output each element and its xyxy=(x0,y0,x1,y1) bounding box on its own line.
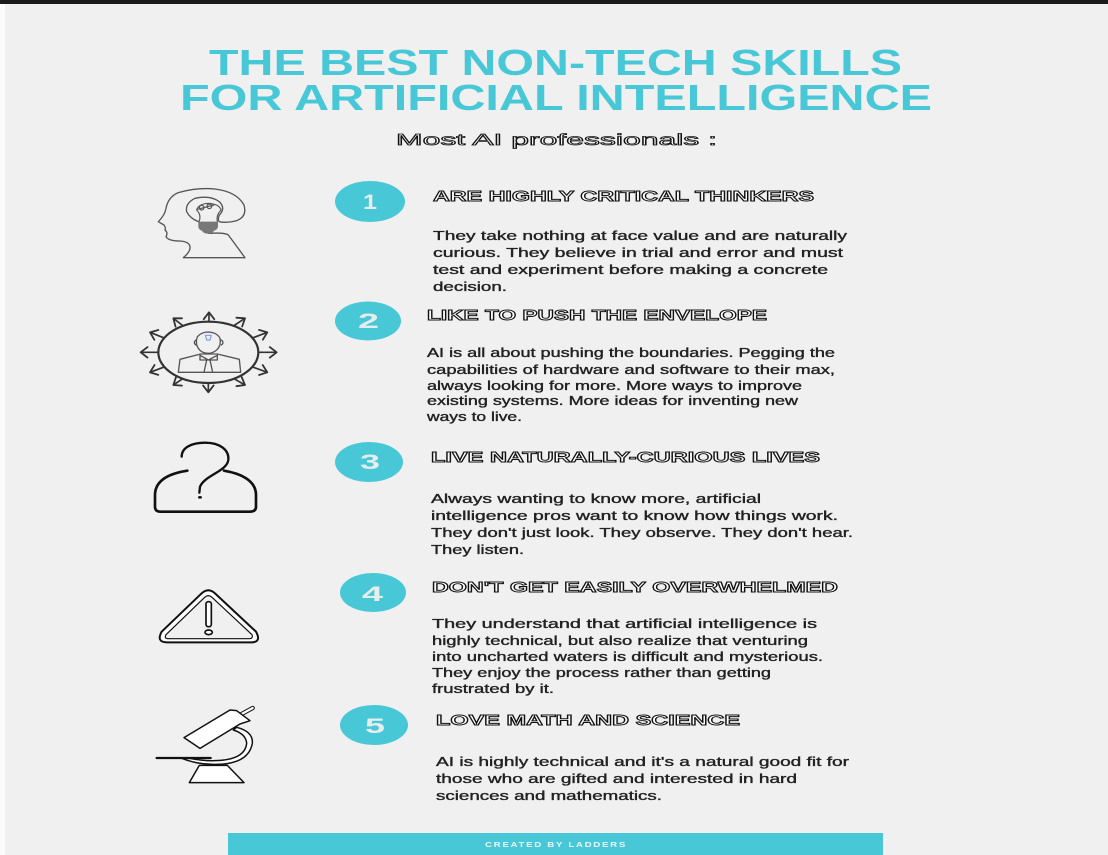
number badge 2: 2 xyxy=(358,310,379,333)
title: THE BEST NON-TECH SKILLS xyxy=(209,42,902,83)
text block 2: existing systems. More ideas for inventing new xyxy=(427,394,799,408)
text block 4: frustrated by it. xyxy=(432,682,554,696)
title: FOR ARTIFICIAL INTELLIGENCE xyxy=(180,77,932,118)
footer banner: CREATED BY LADDERS xyxy=(485,842,627,849)
icon: person inside circle with radiating arrows xyxy=(141,312,277,392)
text block 2: ways to live. xyxy=(426,410,522,424)
text block 1: decision. xyxy=(433,280,507,294)
number badge 1: 1 xyxy=(363,191,377,214)
heading 5: LOVE MATH AND SCIENCE xyxy=(436,712,740,729)
panel: skill 3 naturally curious xyxy=(155,442,853,557)
text block 2: capabilities of hardware and software to their max, xyxy=(427,363,835,377)
text block 1: curious. They believe in trial and error and must xyxy=(433,246,844,260)
text block 3: intelligence pros want to know how things work. xyxy=(431,509,838,523)
subtitle: Most AI professionals : xyxy=(396,132,717,149)
panel: skill 5 math and science xyxy=(157,705,849,803)
text block 4: They enjoy the process rather than getting xyxy=(432,666,771,680)
heading 1: ARE HIGHLY CRITICAL THINKERS xyxy=(433,188,814,205)
panel: skill 4 not overwhelmed xyxy=(160,573,838,696)
text block 1 xyxy=(433,229,848,294)
text block 4: into uncharted waters is difficult and mysterious. xyxy=(432,650,823,664)
heading 3: LIVE NATURALLY-CURIOUS LIVES xyxy=(431,449,820,466)
heading 4: DON'T GET EASILY OVERWHELMED xyxy=(432,579,838,596)
text block 3: They don't just look. They observe. They don't hear. xyxy=(431,526,853,540)
text block 4 xyxy=(432,617,823,696)
icon: warning triangle xyxy=(160,590,258,642)
panel: skill 2 push the envelope xyxy=(141,302,835,424)
text block 5: sciences and mathematics. xyxy=(436,789,662,803)
title xyxy=(180,42,932,118)
text block 3: Always wanting to know more, artificial xyxy=(431,492,761,506)
icon: question mark person xyxy=(155,443,256,512)
number badge 4 xyxy=(340,573,406,612)
number badge 5: 5 xyxy=(365,715,386,738)
text block 1: test and experiment before making a concrete xyxy=(433,263,828,277)
icon: head with light bulb xyxy=(158,189,245,258)
text block 1: They take nothing at face value and are naturally xyxy=(433,229,848,243)
text block 3 xyxy=(431,492,853,557)
text block 4: highly technical, but also realize that venturing xyxy=(432,634,808,648)
icon: microscope xyxy=(157,708,253,783)
text block 5 xyxy=(436,755,849,803)
number badge 4: 4 xyxy=(362,583,384,606)
text block 2: always looking for more. More ways to improve xyxy=(427,379,802,393)
number badge 3 xyxy=(335,442,403,482)
heading 2: LIKE TO PUSH THE ENVELOPE xyxy=(427,307,767,324)
number badge 2 xyxy=(335,302,401,340)
number badge 1 xyxy=(335,181,405,222)
text block 5: those who are gifted and interested in hard xyxy=(436,772,797,786)
footer banner xyxy=(228,833,883,855)
text block 2 xyxy=(426,346,835,424)
number badge 3: 3 xyxy=(360,451,380,474)
text block 5: AI is highly technical and it's a natural good fit for xyxy=(436,755,849,769)
panel: skill 1 critical thinkers xyxy=(158,181,848,294)
text block 4: They understand that artificial intelligence is xyxy=(432,617,817,631)
text block 2: AI is all about pushing the boundaries. Pegging the xyxy=(427,346,835,360)
text block 3: They listen. xyxy=(431,543,524,557)
number badge 5 xyxy=(340,705,408,745)
